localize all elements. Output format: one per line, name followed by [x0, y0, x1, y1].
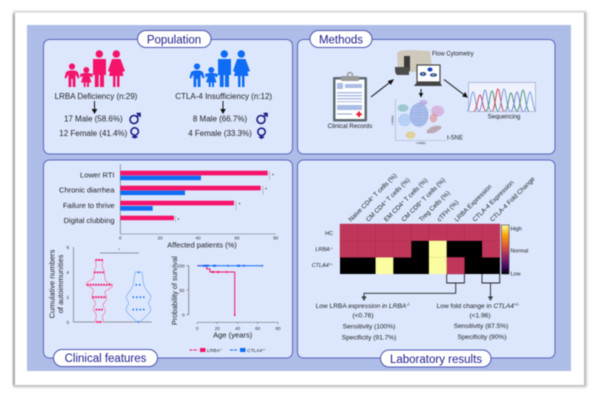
heading: Population — [138, 30, 211, 48]
text: LRBA result: Specificity (91.7%) — [342, 334, 396, 341]
icon: flow cytometer — [395, 50, 432, 75]
bracket arrow: CTLA-4 fold change — [482, 274, 500, 300]
panel: population — [44, 40, 292, 154]
labels: heatmap columns: Naive CD4 — [347, 197, 374, 223]
heading: Clinical features: Clinical features — [65, 353, 147, 365]
labels: heatmap columns: CM CD4 — [365, 201, 387, 223]
text: CTLA-4 result — [437, 302, 520, 341]
text: CTLA-4 group: 8 Male (66.7%) — [193, 114, 247, 123]
text: CTLA-4 group: 4 Female (33.3%) — [188, 129, 252, 138]
text: CTLA-4 group: CTLA-4 Insufficiency (n:12) — [175, 92, 272, 101]
chart: t-SNE scatter: t-SNE2 — [390, 115, 394, 125]
chart: heatmap: HC — [325, 231, 333, 237]
chart: affected patients bars: 40 — [195, 236, 201, 240]
labels: heatmap columns: LRBA Expression — [453, 183, 494, 223]
arrow: cytometry to sequencing — [444, 80, 467, 97]
chart: affected patients bars: Chronic diarrhea — [59, 186, 115, 195]
labels: heatmap columns: T cells (%) — [384, 177, 412, 204]
chart: survival curve: 60 — [255, 326, 261, 331]
chart: affected patients bars: * — [238, 202, 240, 208]
chart: autoimmunities violin plot: of autoimmunities — [56, 254, 65, 313]
chart: affected patients bars: * — [265, 188, 267, 194]
chart: autoimmunities violin plot: 2 — [66, 295, 69, 300]
arrow: LRBA breakdown — [92, 101, 96, 113]
icon: blue family — [190, 50, 250, 87]
labels: heatmap columns: T cells (%) — [371, 172, 399, 200]
labels: heatmap columns: T cells (%) — [402, 177, 429, 204]
text: CTLA-4 result: (<1.96) — [469, 312, 491, 319]
bracket arrow: LRBA expression — [362, 274, 464, 300]
arrow: CTLA-4 breakdown — [221, 101, 225, 113]
chart: t-SNE scatter: t-SNE1 — [416, 141, 426, 145]
chart: autoimmunities violin plot: Cumulative numbers — [48, 249, 56, 318]
chart: survival curve: 100 — [177, 264, 185, 268]
text: LRBA result: Sensitivity (100%) — [343, 323, 395, 330]
chart: survival curve: 0 — [182, 312, 185, 318]
icon: laptop with plots — [414, 65, 442, 86]
chart: autoimmunities violin plot: 4 — [66, 270, 69, 275]
chart: heatmap: -/- — [330, 246, 334, 250]
labels: heatmap columns — [347, 172, 537, 223]
text: LRBA result — [316, 302, 411, 341]
legend: survival groups: CTLA4 — [247, 349, 262, 354]
chart: affected patients bars: Affected patients (%) — [167, 241, 237, 250]
heading: Laboratory results: Laboratory results — [390, 354, 482, 366]
chart: t-SNE scatter — [390, 99, 447, 145]
text: LRBA group: LRBA Deficiency (n:29) — [55, 92, 138, 101]
labels: heatmap columns: EM CD4 — [383, 201, 405, 223]
icon: pink family — [64, 50, 125, 87]
chart: survival curve: 40 — [235, 326, 241, 331]
label: clinical records: Clinical Records — [328, 123, 372, 130]
heading: Laboratory results — [380, 350, 491, 367]
text: LRBA result: (<0.76) — [352, 312, 374, 319]
legend: survival groups: -/- — [220, 348, 223, 352]
text: LRBA result: -/- — [406, 302, 411, 307]
chart: autoimmunities violin plot — [48, 245, 152, 325]
chart: survival curve: Probability of survival — [170, 256, 179, 325]
chart: survival curve: 0 — [196, 326, 199, 331]
labels: heatmap columns: + — [382, 199, 388, 204]
chart: affected patients bars: Lower RTI — [80, 171, 114, 180]
labels: heatmap columns: + — [400, 199, 405, 205]
chart: affected patients bars: Digital clubbing — [64, 216, 114, 225]
labels: heatmap columns: + — [369, 194, 375, 200]
text: CTLA-4 group — [175, 92, 272, 138]
icon: clipboard — [333, 72, 367, 122]
chart: heatmap — [312, 224, 528, 278]
chart: affected patients bars: 20 — [157, 236, 163, 240]
text: CTLA-4 result: +/- — [514, 302, 520, 307]
legend: survival groups: LRBA — [207, 349, 220, 354]
labels: heatmap columns: CTLA-4 Expression — [471, 179, 516, 223]
text: LRBA group: 17 Male (58.6%) — [64, 114, 123, 123]
chart: heatmap: Normal — [510, 248, 528, 254]
text: CTLA-4 result: Low fold change in CTLA4 — [437, 303, 514, 310]
text: CTLA-4 result: Specificity (90%) — [457, 334, 507, 341]
labels: heatmap columns: Treg Cells (%) — [418, 190, 452, 223]
labels: heatmap columns: CTLA-4 Fold Change — [489, 175, 537, 223]
chart: heatmap: CTLA4 — [312, 263, 329, 269]
chart: affected patients bars: 60 — [234, 236, 240, 240]
labels: heatmap columns: + — [417, 199, 423, 204]
chart: affected patients bars — [59, 164, 279, 250]
text: LRBA result: Low LRBA expression in LRBA — [316, 303, 406, 310]
chart: survival curve: 20 — [215, 326, 220, 331]
chart: survival curve — [170, 256, 281, 340]
chart: heatmap: LRBA — [315, 247, 330, 253]
heading: Clinical features — [54, 350, 158, 366]
heading: Methods: Methods — [319, 34, 363, 46]
text: LRBA group: 12 Female (41.4%) — [59, 129, 128, 138]
labels: heatmap columns: cTFH (%) — [436, 199, 460, 223]
heading: Population: Population — [147, 34, 201, 46]
icon: male and female symbols — [130, 114, 267, 139]
legend: survival groups: +/- — [262, 348, 266, 352]
chart: autoimmunities violin plot: 0 — [66, 320, 69, 325]
chart: autoimmunities violin plot: 6 — [66, 245, 69, 250]
labels: heatmap columns: CM CD8 — [400, 201, 423, 223]
labels: heatmap columns: T cells (%) — [420, 177, 447, 204]
chart: heatmap: High — [510, 226, 522, 232]
panel: laboratory results — [298, 160, 555, 358]
chart: survival curve: 80 — [275, 326, 281, 331]
legend: survival groups — [190, 348, 266, 354]
arrow: records to cytometry — [371, 80, 393, 97]
panel: methods — [298, 40, 555, 154]
text: LRBA group — [55, 92, 138, 138]
arrow: cytometry to t-SNE — [420, 89, 422, 96]
chart: affected patients bars: * — [272, 174, 274, 180]
chart: affected patients bars: 80 — [273, 236, 279, 240]
chart: affected patients bars: Failure to thrive — [63, 201, 114, 210]
chart: sequencing chromatogram — [467, 82, 536, 112]
chart: heatmap: Low — [510, 272, 521, 278]
heading: Methods — [310, 30, 372, 48]
panel: clinical features — [44, 160, 292, 358]
chart: survival curve: Age (years) — [213, 330, 253, 340]
label: t-SNE: t-SNE — [447, 136, 463, 142]
chart: affected patients bars: 0 — [119, 236, 122, 240]
chart: heatmap: +/- — [329, 262, 334, 266]
label: flow cytometry: Flow Cytometry — [432, 52, 474, 58]
label: sequencing: Sequencing — [488, 114, 521, 120]
text: CTLA-4 result: Sensitivity (87.5%) — [454, 323, 508, 330]
chart: affected patients bars: * — [178, 218, 180, 224]
chart: autoimmunities violin plot: * — [118, 247, 120, 252]
chart: survival curve: 50 — [179, 288, 185, 293]
